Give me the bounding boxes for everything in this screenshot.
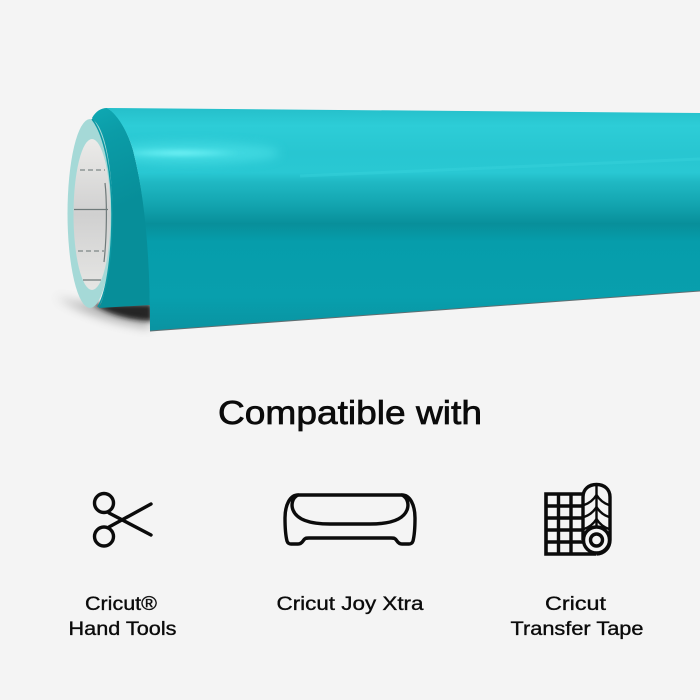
label: Cricut Hand Tools: Cricut® [85, 594, 157, 615]
icon: transfer tape roll [546, 484, 610, 554]
label: Cricut Hand Tools [68, 594, 176, 640]
icon: scissors [94, 494, 151, 546]
label: Cricut Transfer Tape: Cricut [545, 594, 607, 615]
icon: Cricut Joy Xtra machine [285, 495, 415, 544]
label: Cricut Joy Xtra: Cricut Joy Xtra [276, 594, 424, 615]
title: Compatible with [218, 394, 482, 431]
roll shadow [55, 296, 152, 328]
rim right edge highlight [92, 119, 112, 307]
inner roll wrap [92, 108, 150, 308]
label: Cricut Transfer Tape: Transfer Tape [510, 619, 644, 640]
sheet bottom edge [150, 291, 700, 331]
vinyl roll [55, 100, 700, 340]
label: Cricut Hand Tools: Hand Tools [68, 619, 176, 640]
label: Cricut Transfer Tape [510, 594, 644, 640]
cardboard core [74, 139, 110, 290]
front vinyl sheet [100, 100, 700, 340]
roll rim [68, 119, 112, 308]
